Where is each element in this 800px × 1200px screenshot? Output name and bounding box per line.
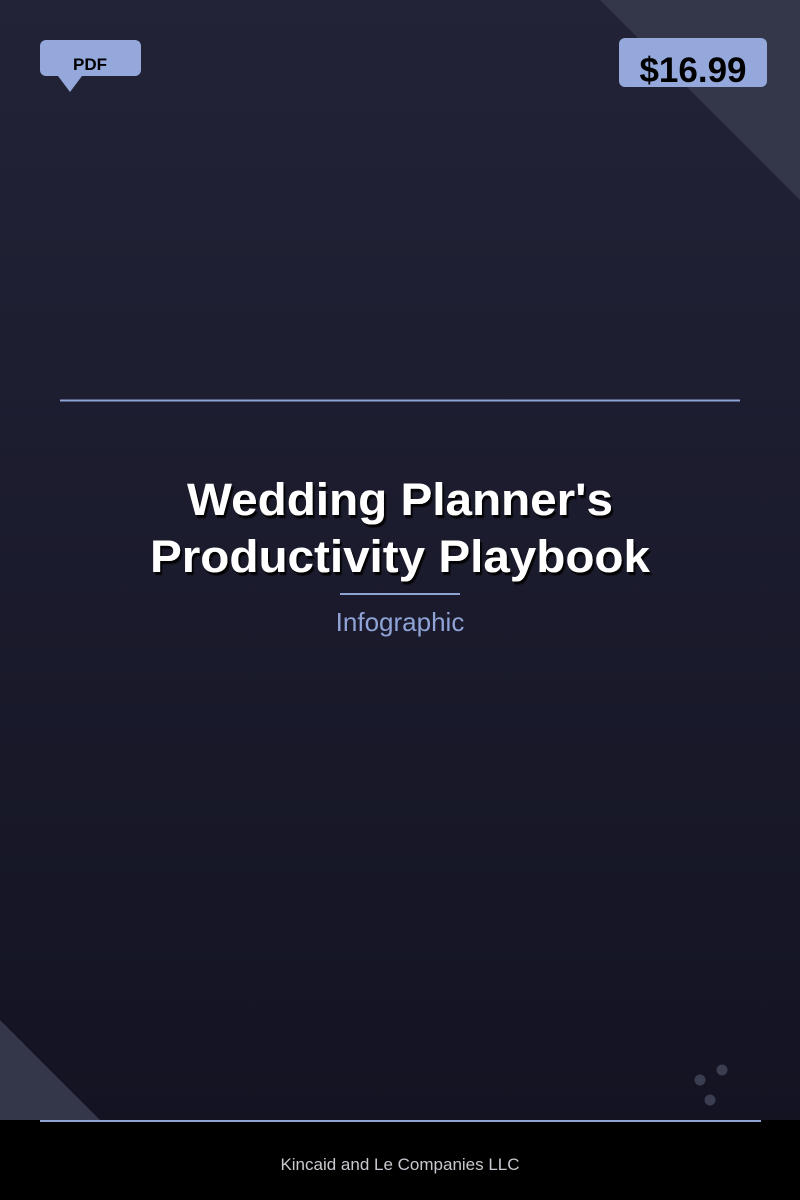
title: Productivity Playbook — [150, 531, 651, 582]
decorative dots — [694, 1064, 728, 1106]
subtitle: Infographic — [336, 607, 464, 637]
badge: price: $16.99 — [639, 51, 747, 90]
decorative corner: bottom left — [0, 1020, 100, 1120]
decorative corner: top right — [600, 0, 800, 200]
title: Wedding Planner's — [187, 474, 613, 525]
title — [150, 474, 651, 582]
badge: PDF: PDF — [73, 55, 107, 74]
badge: price — [619, 38, 767, 90]
footer — [0, 1120, 800, 1200]
footer: Kincaid and Le Companies LLC — [280, 1155, 520, 1174]
badge: PDF — [40, 40, 141, 92]
